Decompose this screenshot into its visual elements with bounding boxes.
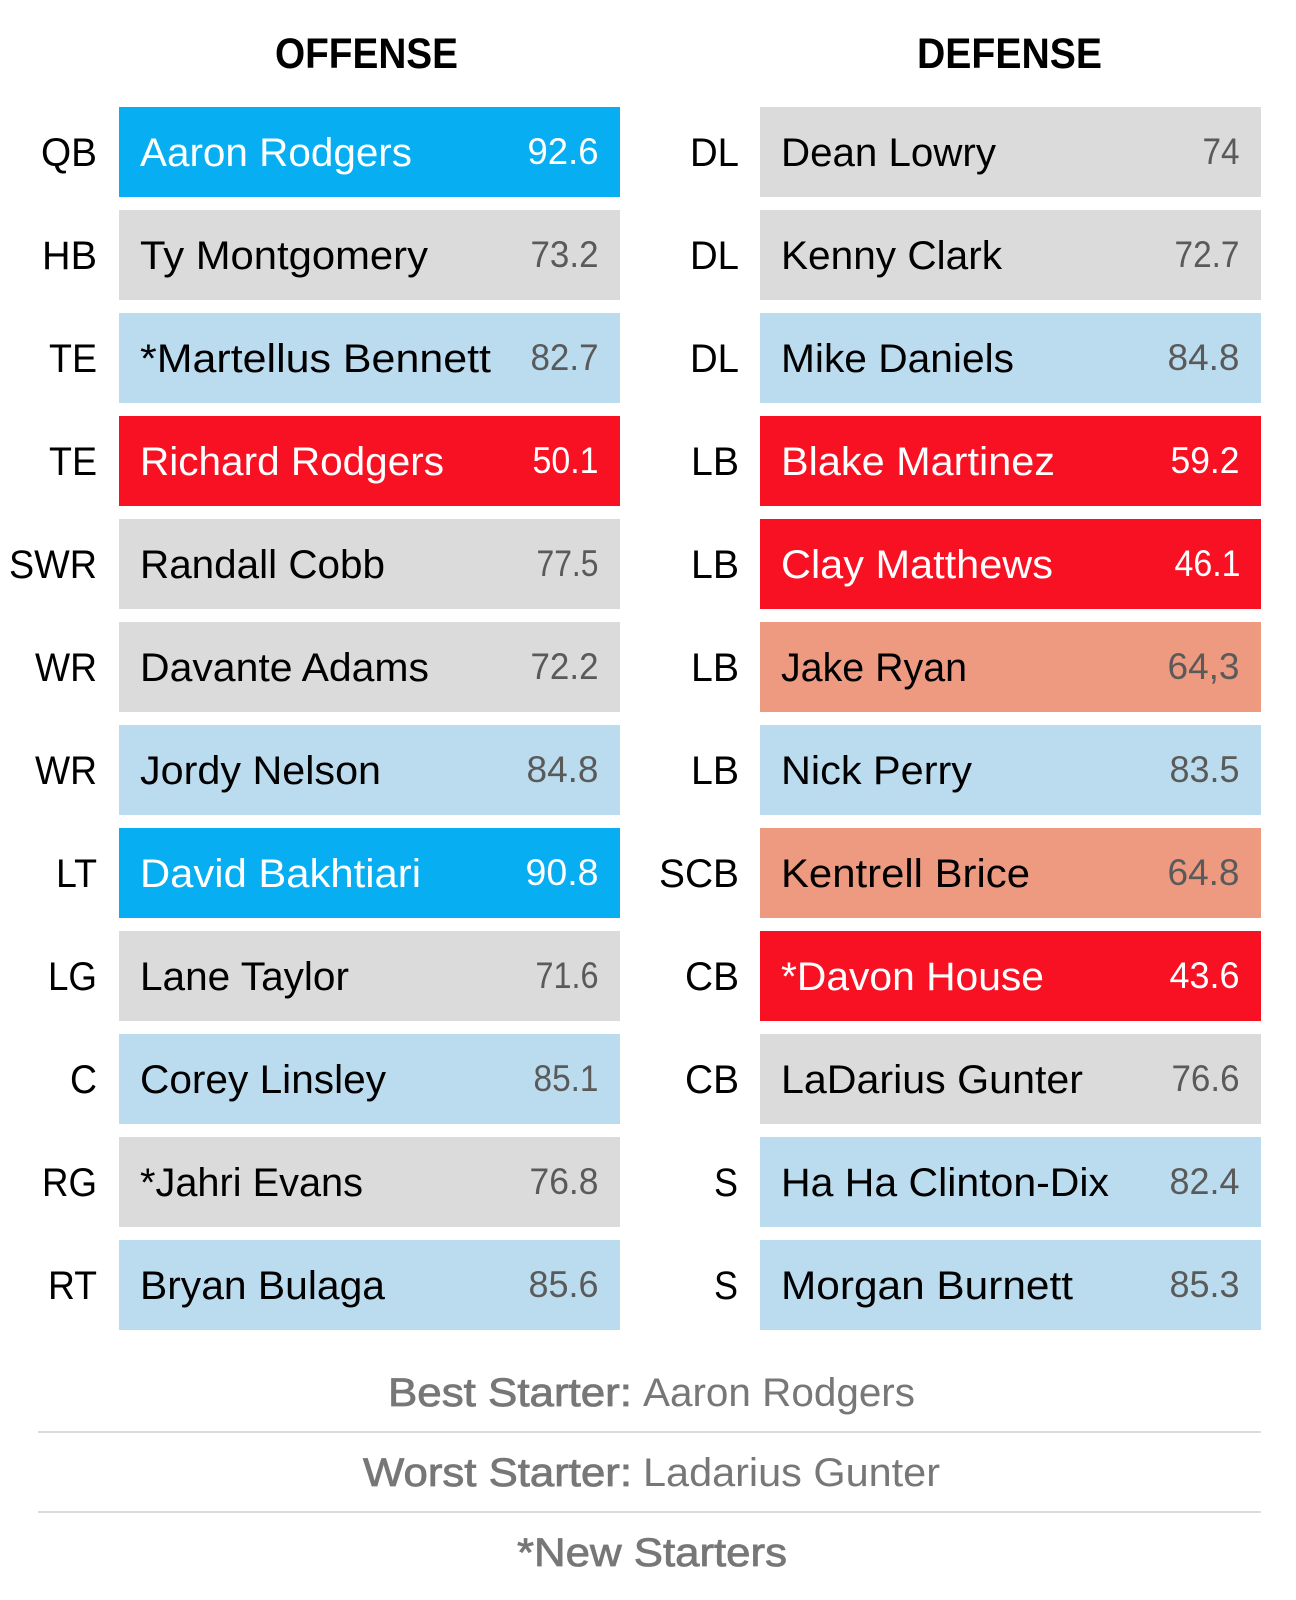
row: DL Mike Daniels bbox=[690, 313, 1261, 403]
row: TE Martellus Bennett: *Martellus Bennett bbox=[140, 337, 491, 381]
row: DL Mike Daniels: DL bbox=[690, 337, 739, 381]
row: HB Ty Montgomery: Ty Montgomery bbox=[140, 234, 428, 278]
row: S Morgan Burnett: 85.3 bbox=[1170, 1264, 1240, 1305]
row: LB Nick Perry: Nick Perry bbox=[781, 749, 972, 793]
row: LB Clay Matthews: LB bbox=[691, 543, 739, 587]
row: LB Blake Martinez: LB bbox=[691, 440, 739, 484]
row: S Morgan Burnett: Morgan Burnett bbox=[781, 1264, 1073, 1308]
row: TE Martellus Bennett: TE bbox=[49, 337, 97, 381]
row: DL Kenny Clark: 72.7 bbox=[1174, 234, 1240, 275]
row: LT David Bakhtiari: LT bbox=[56, 852, 97, 896]
row: HB Ty Montgomery: 73.2 bbox=[530, 234, 598, 275]
row: HB Ty Montgomery: HB bbox=[42, 234, 97, 278]
row: RG Jahri Evans: RG bbox=[42, 1161, 97, 1205]
row: LB Blake Martinez: Blake Martinez bbox=[781, 440, 1055, 484]
row: QB Aaron Rodgers: QB bbox=[41, 131, 97, 175]
row: LT David Bakhtiari: 90.8 bbox=[526, 852, 598, 893]
row: S Ha Ha Clinton-Dix: S bbox=[714, 1161, 738, 1205]
row: LB Blake Martinez bbox=[691, 416, 1261, 506]
row: RT Bryan Bulaga: Bryan Bulaga bbox=[140, 1264, 386, 1308]
row: WR Jordy Nelson bbox=[35, 725, 620, 815]
row: C Corey Linsley: 85.1 bbox=[534, 1058, 598, 1099]
text block: best starter: Best Starter: bbox=[388, 1371, 632, 1415]
row: LB Jake Ryan: Jake Ryan bbox=[781, 646, 967, 690]
text block: worst starter: Worst Starter: bbox=[363, 1451, 632, 1495]
row: S Ha Ha Clinton-Dix bbox=[714, 1137, 1261, 1227]
heading: defense: DEFENSE bbox=[917, 30, 1102, 78]
row: CB Davon House: *Davon House bbox=[781, 955, 1044, 999]
row: S Morgan Burnett: S bbox=[714, 1264, 738, 1308]
row: S Ha Ha Clinton-Dix: 82.4 bbox=[1170, 1161, 1240, 1202]
row: CB LaDarius Gunter: 76.6 bbox=[1172, 1058, 1240, 1099]
row: RT Bryan Bulaga bbox=[48, 1240, 620, 1330]
row: LB Jake Ryan bbox=[691, 622, 1261, 712]
row: HB Ty Montgomery bbox=[42, 210, 620, 300]
row: TE Richard Rodgers: TE bbox=[49, 440, 97, 484]
row: RG Jahri Evans: *Jahri Evans bbox=[140, 1161, 363, 1205]
row: C Corey Linsley bbox=[70, 1034, 620, 1124]
row: LG Lane Taylor bbox=[48, 931, 620, 1021]
panel: defense roster bbox=[659, 107, 1261, 1330]
row: SCB Kentrell Brice bbox=[659, 828, 1261, 918]
row: DL Kenny Clark: DL bbox=[690, 234, 739, 278]
row: SWR Randall Cobb: SWR bbox=[9, 543, 97, 587]
row: LB Blake Martinez: 59.2 bbox=[1170, 440, 1240, 481]
row: WR Davante Adams bbox=[35, 622, 620, 712]
text block: best starter bbox=[388, 1371, 915, 1415]
row: LB Jake Ryan: 64,3 bbox=[1168, 646, 1240, 687]
row: CB LaDarius Gunter: CB bbox=[685, 1058, 739, 1102]
panel: offense roster bbox=[9, 107, 620, 1330]
row: SCB Kentrell Brice: 64.8 bbox=[1168, 852, 1240, 893]
row: LG Lane Taylor: 71.6 bbox=[536, 955, 598, 996]
row: S Morgan Burnett bbox=[714, 1240, 1261, 1330]
row: WR Davante Adams: 72.2 bbox=[530, 646, 598, 687]
row: TE Richard Rodgers: 50.1 bbox=[532, 440, 598, 481]
row: SCB Kentrell Brice: Kentrell Brice bbox=[781, 852, 1030, 896]
row: SWR Randall Cobb: 77.5 bbox=[536, 543, 598, 584]
text block: best starter: Aaron Rodgers bbox=[643, 1371, 915, 1415]
row: LB Clay Matthews bbox=[691, 519, 1261, 609]
row: QB Aaron Rodgers: Aaron Rodgers bbox=[140, 131, 412, 175]
row: DL Kenny Clark bbox=[690, 210, 1261, 300]
row: CB Davon House: 43.6 bbox=[1170, 955, 1240, 996]
row: RT Bryan Bulaga: 85.6 bbox=[528, 1264, 598, 1305]
row: LT David Bakhtiari bbox=[56, 828, 620, 918]
row: SWR Randall Cobb bbox=[9, 519, 620, 609]
row: DL Dean Lowry: DL bbox=[690, 131, 739, 175]
row: SWR Randall Cobb: Randall Cobb bbox=[140, 543, 385, 587]
row: QB Aaron Rodgers: 92.6 bbox=[528, 131, 598, 172]
row: CB LaDarius Gunter: LaDarius Gunter bbox=[781, 1058, 1083, 1102]
row: DL Mike Daniels: Mike Daniels bbox=[781, 337, 1014, 381]
row: TE Richard Rodgers bbox=[49, 416, 620, 506]
row: CB LaDarius Gunter bbox=[685, 1034, 1261, 1124]
row: WR Davante Adams: Davante Adams bbox=[140, 646, 429, 690]
row: LB Clay Matthews: Clay Matthews bbox=[781, 543, 1053, 587]
row: C Corey Linsley: Corey Linsley bbox=[140, 1058, 386, 1102]
row: DL Dean Lowry: 74 bbox=[1202, 131, 1240, 172]
row: LB Clay Matthews: 46.1 bbox=[1174, 543, 1240, 584]
row: DL Kenny Clark: Kenny Clark bbox=[781, 234, 1003, 278]
row: CB Davon House bbox=[685, 931, 1261, 1021]
text block: worst starter bbox=[363, 1451, 940, 1495]
row: DL Dean Lowry: Dean Lowry bbox=[781, 131, 996, 175]
row: RG Jahri Evans bbox=[42, 1137, 620, 1227]
heading: offense: OFFENSE bbox=[275, 30, 458, 78]
row: LB Nick Perry: LB bbox=[691, 749, 739, 793]
row: TE Richard Rodgers: Richard Rodgers bbox=[140, 440, 444, 484]
row: LB Nick Perry bbox=[691, 725, 1261, 815]
row: QB Aaron Rodgers bbox=[41, 107, 620, 197]
row: DL Dean Lowry bbox=[690, 107, 1261, 197]
row: WR Jordy Nelson: 84.8 bbox=[526, 749, 598, 790]
text block: new starters note: *New Starters bbox=[517, 1531, 787, 1575]
row: DL Mike Daniels: 84.8 bbox=[1168, 337, 1240, 378]
row: WR Jordy Nelson: Jordy Nelson bbox=[140, 749, 381, 793]
row: CB Davon House: CB bbox=[685, 955, 739, 999]
row: TE Martellus Bennett bbox=[49, 313, 620, 403]
row: C Corey Linsley: C bbox=[70, 1058, 97, 1102]
row: S Ha Ha Clinton-Dix: Ha Ha Clinton-Dix bbox=[781, 1161, 1109, 1205]
row: RT Bryan Bulaga: RT bbox=[48, 1264, 97, 1308]
row: LG Lane Taylor: Lane Taylor bbox=[140, 955, 349, 999]
row: LB Jake Ryan: LB bbox=[691, 646, 739, 690]
row: LB Nick Perry: 83.5 bbox=[1170, 749, 1240, 790]
row: WR Davante Adams: WR bbox=[35, 646, 97, 690]
row: SCB Kentrell Brice: SCB bbox=[659, 852, 739, 896]
row: LG Lane Taylor: LG bbox=[48, 955, 97, 999]
row: TE Martellus Bennett: 82.7 bbox=[530, 337, 598, 378]
row: LT David Bakhtiari: David Bakhtiari bbox=[140, 852, 421, 896]
text block: worst starter: Ladarius Gunter bbox=[643, 1451, 940, 1495]
row: WR Jordy Nelson: WR bbox=[35, 749, 97, 793]
row: RG Jahri Evans: 76.8 bbox=[530, 1161, 598, 1202]
